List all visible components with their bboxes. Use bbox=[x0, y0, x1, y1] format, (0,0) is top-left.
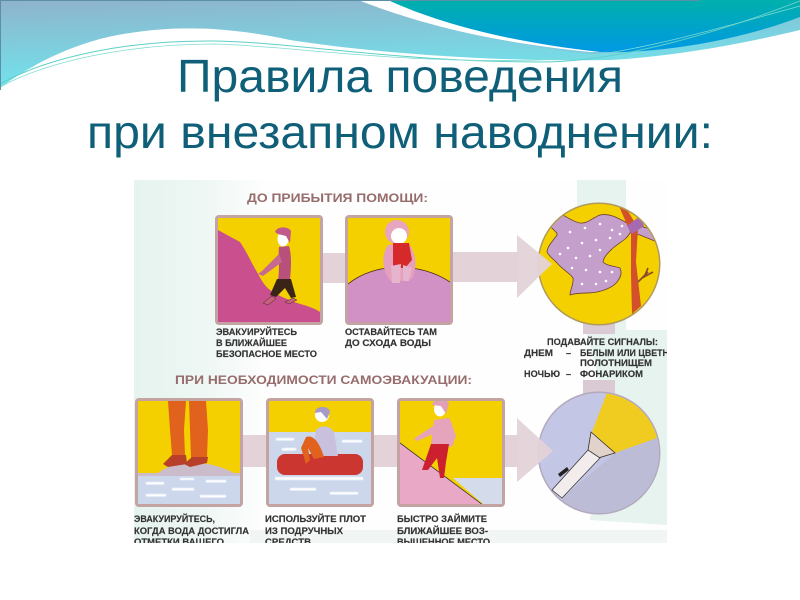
panel: climb to higher ground bbox=[397, 398, 505, 507]
title: при внезапном наводнении: bbox=[87, 106, 713, 158]
caption: give signals: ДНЕМ bbox=[524, 348, 553, 358]
caption: evacuate when water reaches mark: ЭВАКУИРУЙТЕСЬ, bbox=[134, 513, 215, 524]
caption: give signals: ПОДАВАЙТЕ СИГНАЛЫ: bbox=[547, 336, 658, 347]
heading: before help arrives: ДО ПРИБЫТИЯ ПОМОЩИ: bbox=[247, 192, 428, 205]
panel: evacuate to safe place bbox=[215, 215, 323, 325]
caption: give signals bbox=[524, 336, 667, 378]
caption: take higher ground: БЫСТРО ЗАЙМИТЕ bbox=[397, 513, 487, 524]
caption: stay: ДО СХОДА ВОДЫ bbox=[345, 338, 431, 348]
caption: use a raft: ИЗ ПОДРУЧНЫХ bbox=[265, 526, 344, 536]
caption: evacuate: БЕЗОПАСНОЕ МЕСТО bbox=[216, 349, 317, 359]
panel: stay until water recedes bbox=[345, 215, 453, 325]
caption: give signals: БЕЛЫМ ИЛИ ЦВЕТНЫМ bbox=[580, 348, 685, 358]
caption: use a raft: СРЕДСТВ bbox=[265, 537, 311, 547]
caption: give signals: НОЧЬЮ bbox=[524, 369, 561, 379]
icon: daytime signal cloth bbox=[538, 202, 660, 326]
caption: take higher ground: ВЫШЕННОЕ МЕСТО bbox=[397, 537, 490, 547]
caption: give signals: – bbox=[566, 348, 571, 358]
caption: give signals: – bbox=[566, 369, 571, 379]
caption: evacuate when water reaches mark: ОТМЕТКИ ВАШЕГО bbox=[134, 537, 224, 547]
panel: improvised raft bbox=[266, 398, 374, 507]
arrow: to signal circle bbox=[517, 235, 552, 298]
caption: use a raft bbox=[265, 513, 366, 543]
caption: stay: ОСТАВАЙТЕСЬ ТАМ bbox=[345, 326, 437, 337]
heading: if self-evacuation is needed: ПРИ НЕОБХОДИМОСТИ САМОЭВАКУАЦИИ: bbox=[175, 374, 472, 387]
caption: evacuate bbox=[216, 326, 317, 359]
connector bars bbox=[243, 252, 615, 467]
caption: evacuate when water reaches mark bbox=[134, 513, 249, 543]
panel: legs at water mark bbox=[135, 398, 243, 507]
caption: give signals: ФОНАРИКОМ bbox=[580, 369, 643, 379]
caption: evacuate: ЭВАКУИРУЙТЕСЬ bbox=[216, 326, 297, 337]
header wave background bbox=[0, 0, 800, 90]
caption: evacuate: В БЛИЖАЙШЕЕ bbox=[216, 337, 287, 348]
title bbox=[87, 50, 713, 158]
caption: evacuate when water reaches mark: КОГДА ВОДА ДОСТИГЛА bbox=[134, 526, 249, 536]
arrow: to flashlight circle bbox=[517, 418, 553, 482]
caption: stay bbox=[345, 326, 437, 348]
caption: take higher ground bbox=[398, 513, 490, 543]
title: Правила поведения bbox=[177, 50, 623, 102]
caption: give signals: ПОЛОТНИЩЕМ bbox=[580, 358, 652, 368]
caption: use a raft: ИСПОЛЬЗУЙТЕ ПЛОТ bbox=[265, 513, 366, 524]
infographic panel bbox=[134, 180, 685, 547]
caption: take higher ground: БЛИЖАЙШЕЕ ВОЗ- bbox=[397, 525, 488, 536]
icon: flashlight in beam bbox=[538, 390, 660, 515]
